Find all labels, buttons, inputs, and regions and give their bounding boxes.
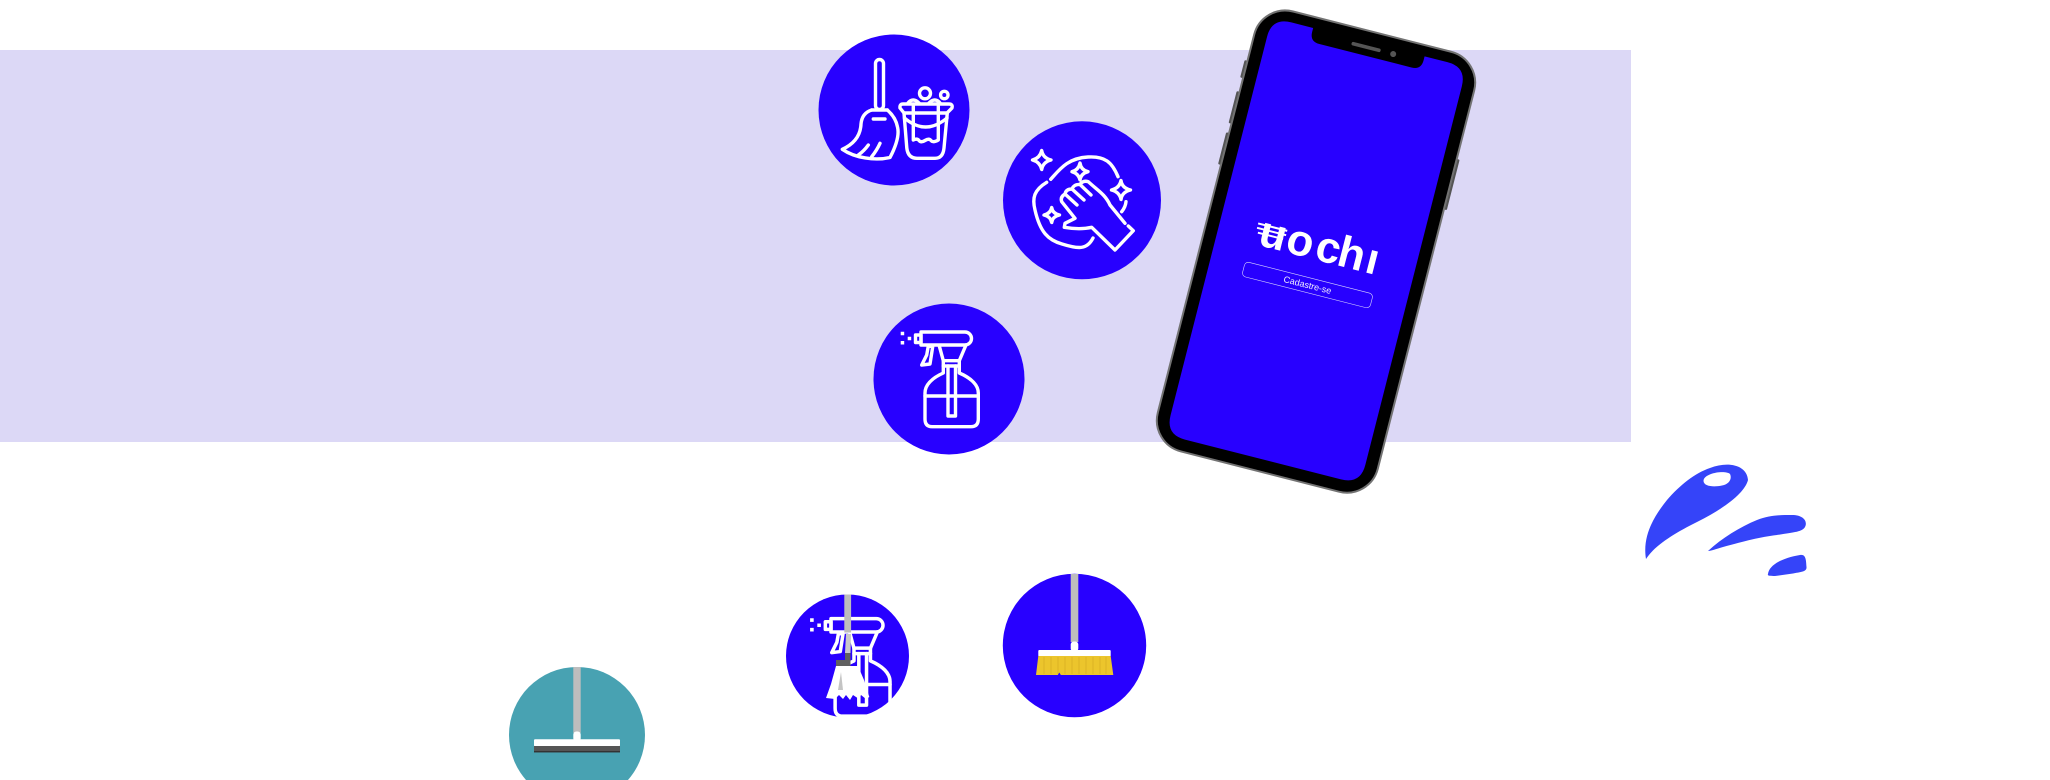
sign-up button — [1242, 261, 1373, 309]
icon: spray bottle — [874, 304, 1024, 454]
medium droplet — [1708, 515, 1806, 551]
phone screen — [1166, 17, 1467, 484]
icon: hand wiping with cloth — [1003, 121, 1161, 279]
smartphone — [1147, 3, 1485, 500]
phone body — [1150, 4, 1482, 500]
small droplet — [1768, 555, 1807, 576]
icon: teal squeegee — [509, 667, 645, 780]
splash droplets — [1645, 465, 1807, 576]
uochi logo: uochi — [1254, 207, 1385, 285]
notch speaker — [1351, 42, 1381, 52]
icon: spray bottle with mop — [786, 594, 909, 718]
large droplet — [1645, 465, 1748, 559]
phone side buttons — [1218, 60, 1470, 222]
notch camera — [1390, 50, 1397, 58]
sign-up button: Cadastre-se — [1282, 274, 1332, 296]
icon: yellow broom — [1003, 574, 1146, 717]
lavender background band — [0, 50, 1631, 442]
icon: broom and bucket — [818, 34, 970, 186]
